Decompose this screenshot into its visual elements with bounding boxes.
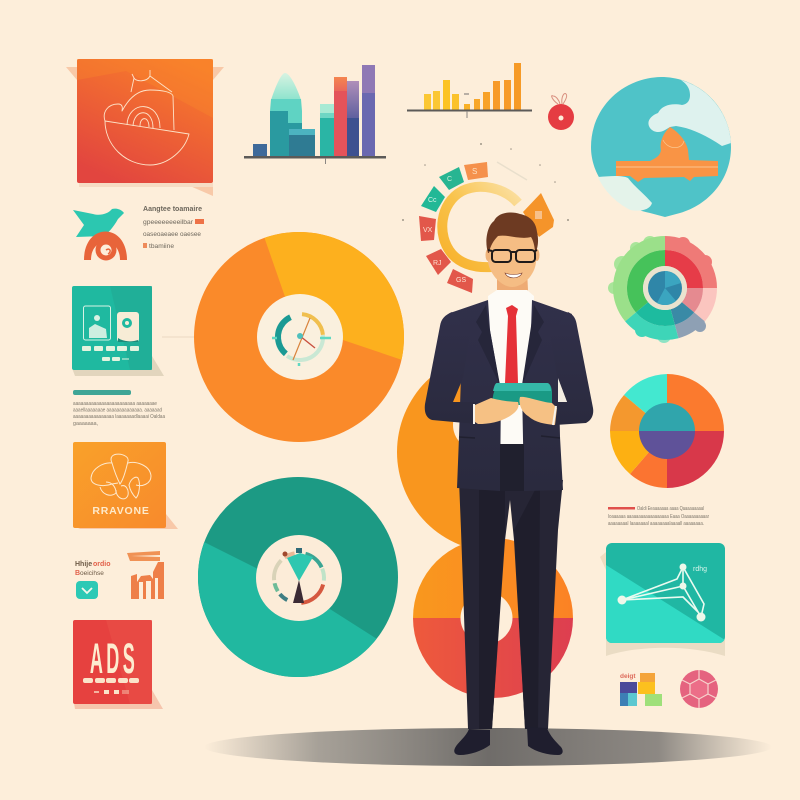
cuffs — [474, 404, 556, 425]
pills — [82, 346, 139, 361]
panel: teal network card — [600, 543, 725, 656]
tie — [505, 305, 518, 383]
text block: teal bar caption: aaaaaaaaaaaaaaaa laaaaaaadlaaaai Oaldaa — [73, 414, 166, 420]
text block: top left caption: tbamiine — [149, 244, 175, 250]
chart: orange circle behind figure — [397, 378, 462, 545]
hands — [475, 397, 557, 425]
text block: top left caption: oaseoaeaee oaesee — [143, 232, 202, 238]
pills — [83, 678, 139, 694]
chart: big orange and yellow pie — [194, 232, 404, 442]
chart: multi-colour bar chart — [244, 65, 386, 164]
right arm — [550, 312, 593, 425]
smile — [505, 273, 522, 278]
title: ADS: ADS — [90, 634, 138, 682]
network lines — [622, 567, 704, 617]
text block: teal bar caption: aaaellaaaaaaae aaaaaaaaaaaaaa. aaaaaad — [73, 408, 162, 414]
text block: small caption — [75, 561, 110, 577]
text block: small caption: Hhije — [75, 561, 92, 568]
icon: orange mini chart with bookmark — [127, 551, 164, 599]
chart: ring of segments: S — [472, 167, 477, 176]
text block: teal bar caption: aaaaaaaaaaaaaaaaaaaaaaaa aaaaaaae — [73, 401, 157, 407]
ears — [486, 249, 490, 261]
chart: ring of segments: VX — [423, 227, 433, 234]
icon: teal bird and orange spiral — [73, 209, 127, 260]
jacket — [425, 300, 593, 491]
icon: pink hexagon ball — [680, 670, 718, 708]
text block: top left caption: Aangtee toamaire — [143, 206, 202, 213]
neck — [497, 270, 528, 302]
panel: teal network card: rdhg — [693, 566, 707, 573]
icon: cream card with circle — [117, 312, 139, 342]
orange landmass — [616, 127, 718, 182]
text block: right caption — [608, 506, 709, 527]
lapels — [476, 305, 544, 385]
panel: orange brand card: RRAVONE — [92, 505, 150, 517]
text block: right caption: Oaldi Eeaaaaaaa aaaa Qaaaaaaaaal — [637, 506, 704, 512]
icon: red ornament with loops — [548, 94, 574, 130]
text block: teal bar caption — [73, 390, 166, 427]
head — [486, 212, 540, 287]
chart: ring of segments: RJ — [433, 260, 442, 267]
text block: teal bar caption: gaaaaaaa, — [73, 421, 98, 427]
icon: flower line art — [91, 454, 151, 499]
shoes — [454, 727, 563, 755]
gap right arm — [558, 378, 567, 402]
text block: small caption: ordio — [93, 561, 110, 568]
waist fill below shirt — [500, 444, 524, 491]
torso — [450, 300, 572, 491]
tablet — [492, 383, 552, 405]
chart: yellow to orange bars — [407, 63, 532, 118]
ground shadow — [204, 728, 772, 766]
chart: ring of segments — [402, 143, 569, 293]
globe — [591, 77, 731, 217]
icon: gauge dial — [264, 543, 334, 613]
figure: businessman — [425, 212, 593, 755]
icon: bowl and arches line art — [104, 70, 189, 165]
icon: picture frame — [84, 306, 110, 340]
leader line — [162, 336, 196, 338]
chart: ring of segments: GS — [456, 277, 466, 284]
text block: top left caption: gpeeeeeeeeilbar — [143, 220, 193, 226]
clouds — [598, 80, 731, 211]
text block: small caption: B — [75, 570, 80, 577]
icon: coloured blocks — [620, 673, 662, 706]
icon: clock dial — [269, 306, 331, 368]
panel: ADS red card — [73, 620, 163, 709]
panel: teal media card — [72, 286, 164, 376]
left arm — [425, 312, 476, 424]
text block: top left caption — [143, 206, 204, 250]
panel: orange brand card — [73, 442, 178, 529]
chart: ring of segments: C — [447, 176, 452, 183]
pocket flaps — [459, 436, 560, 438]
text block: small caption: oeicihse — [80, 570, 104, 577]
hair — [486, 212, 538, 254]
text block: right caption: aaaaaaaal Iaaaaaaal aaaaaaaalaaaall aaaaaaaa. — [608, 521, 704, 527]
chart: ring of segments: Cc — [428, 197, 437, 204]
icon: coloured blocks: deigt — [620, 673, 636, 680]
glasses — [488, 250, 537, 262]
chart: lower orange and red ring — [413, 538, 573, 698]
text block: right caption: Ioaaaaaa aaaaaaaaaaaaaaaaaa Eaaa Oaaaaaaaaaar — [608, 514, 709, 520]
chart: sunburst — [602, 225, 728, 351]
trousers — [459, 480, 563, 729]
chart: donut pie — [610, 374, 724, 488]
icon: teal chevron button — [76, 581, 98, 599]
chart: teal pie — [198, 477, 398, 677]
panel: orange-red illustration card — [66, 59, 224, 196]
shirt — [488, 290, 534, 445]
